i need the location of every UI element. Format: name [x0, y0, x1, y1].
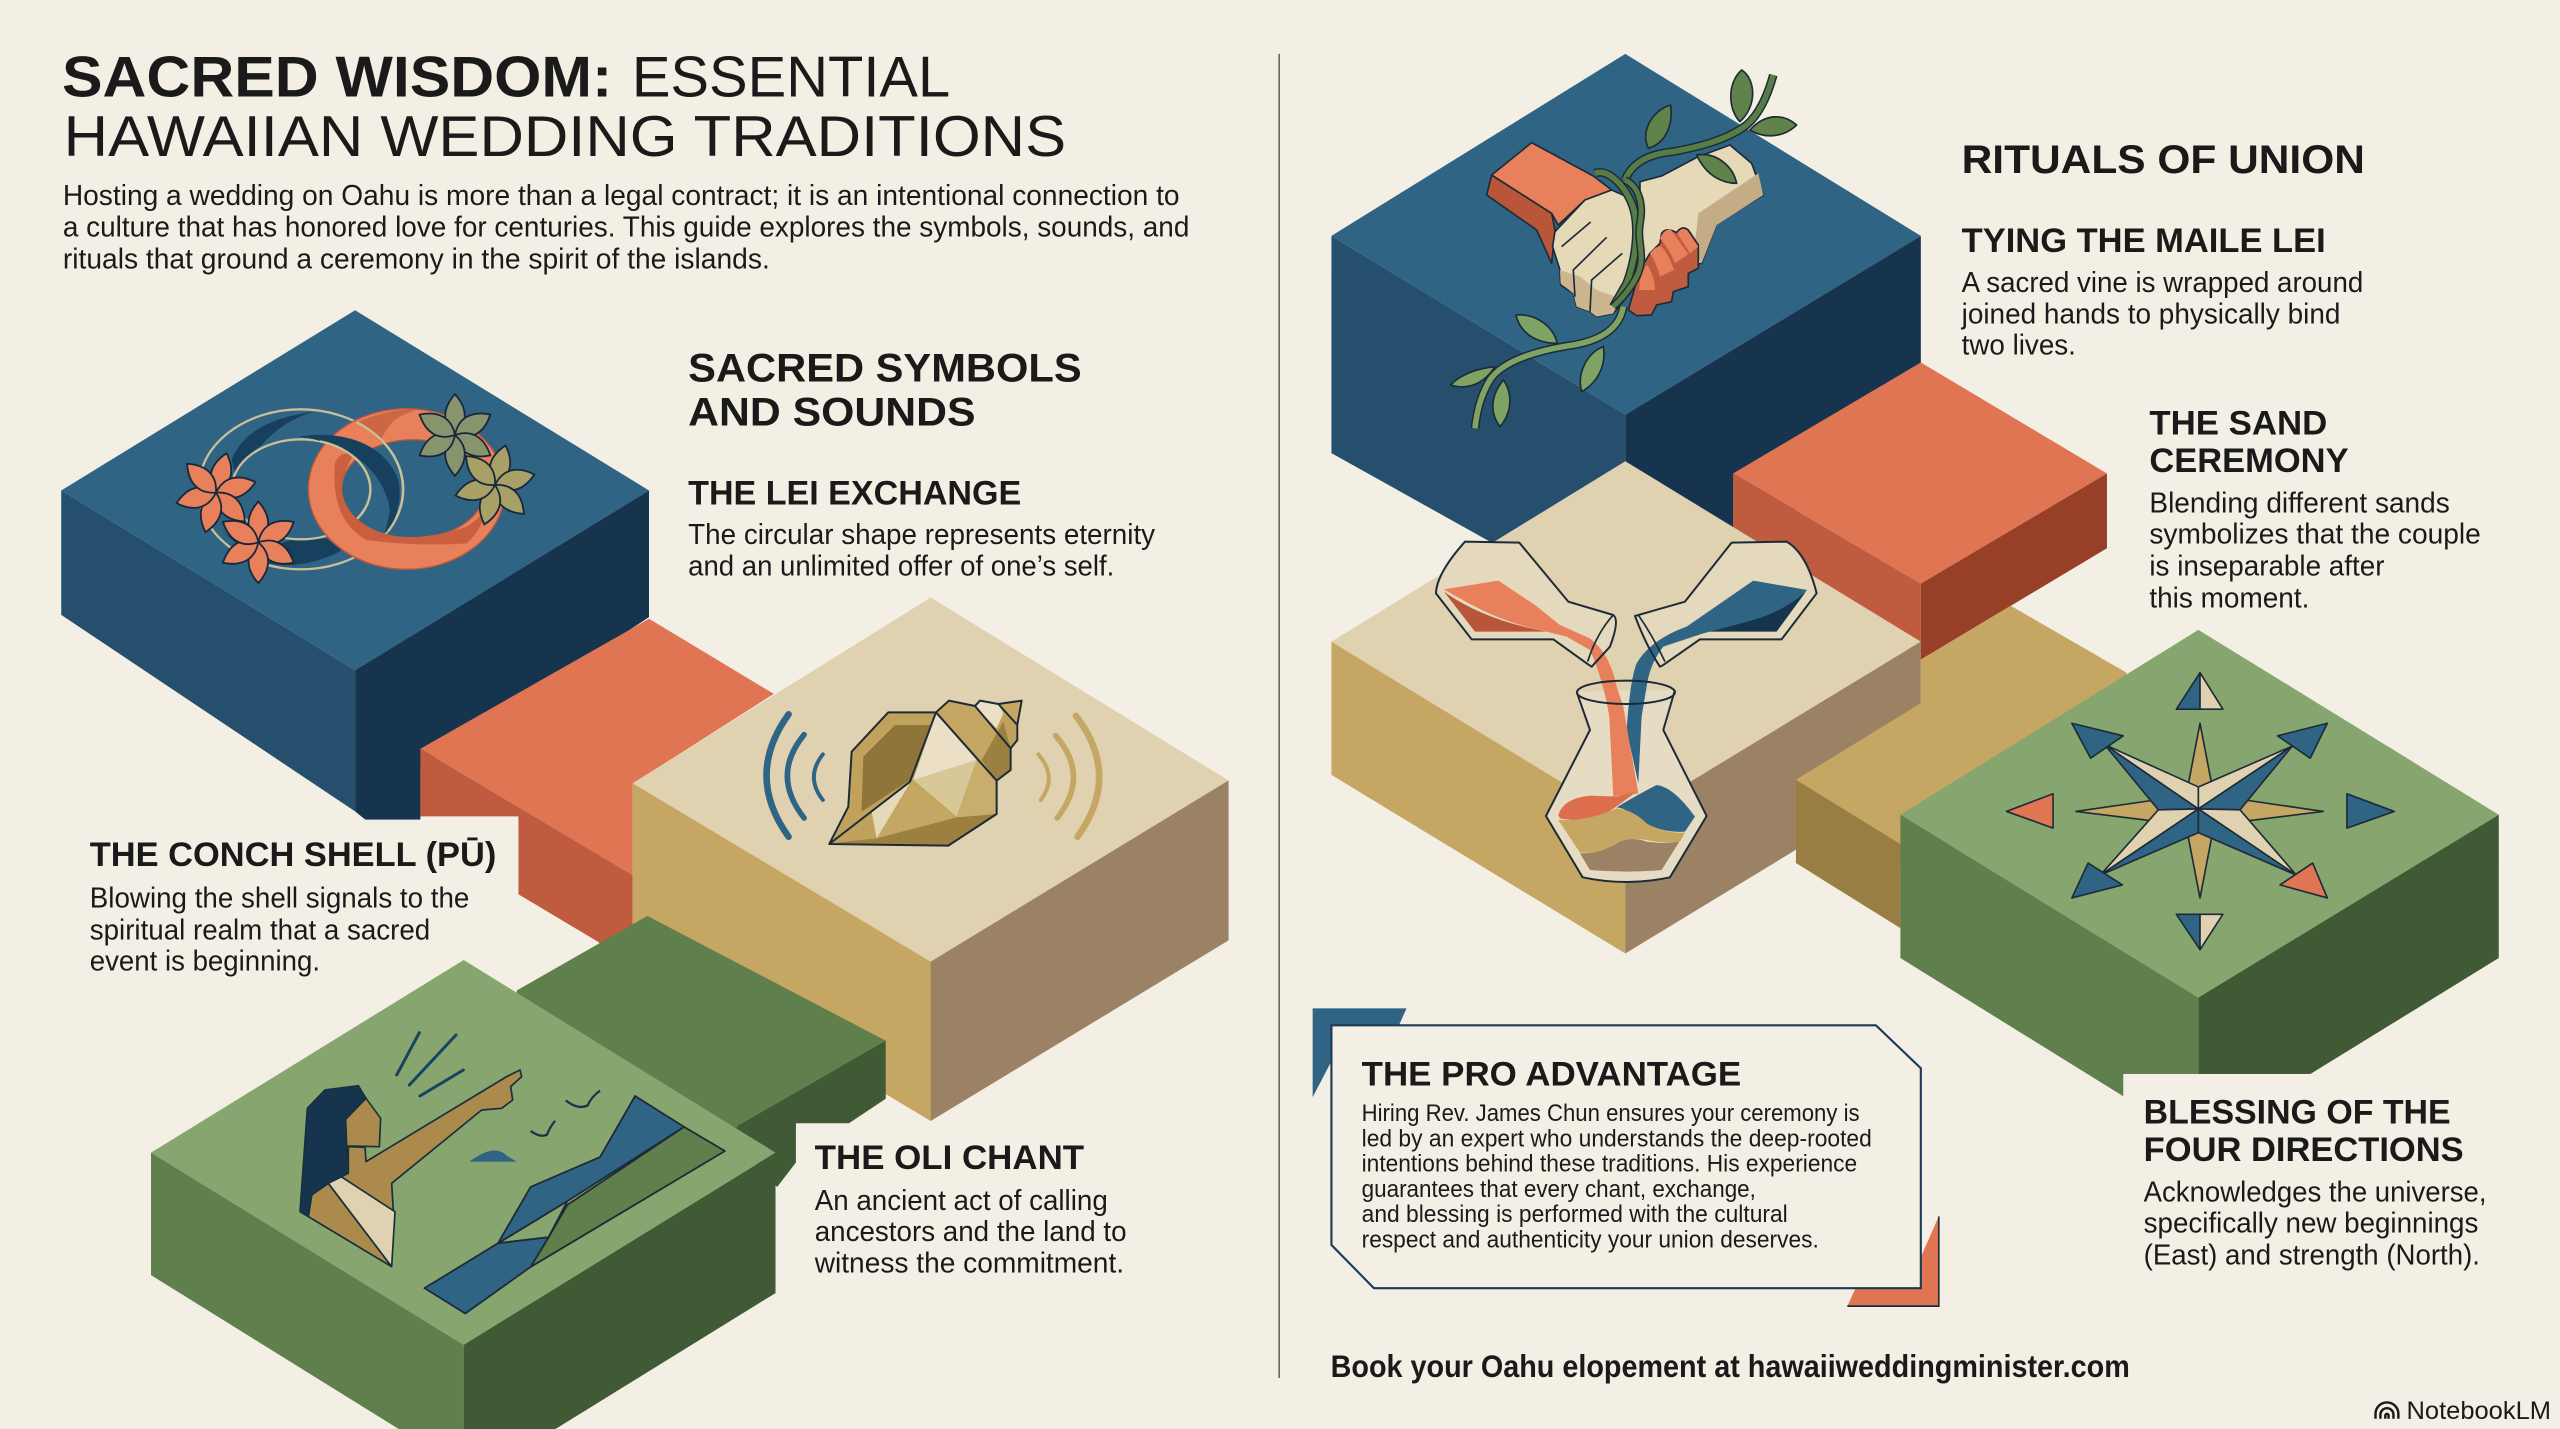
callout: the pro advantage: THE PRO ADVANTAGE — [1362, 1056, 1741, 1094]
panel: conch shell text: event is beginning. — [90, 946, 320, 978]
call to action: Book your Oahu elopement at hawaiiweddingminister.com — [1331, 1348, 2130, 1384]
title: HAWAIIAN WEDDING TRADITIONS — [64, 105, 1066, 169]
panel: front green oli cube — [151, 960, 776, 1429]
callout: the pro advantage: Hiring Rev. James Chun ensures your ceremony is — [1362, 1100, 1860, 1127]
panel: coral sand block — [1733, 362, 2107, 660]
panel: tan conch cube — [633, 598, 1229, 1121]
panel: conch shell text — [90, 836, 496, 978]
panel: maile lei text — [1961, 222, 2363, 361]
panel: maile lei text: TYING THE MAILE LEI — [1962, 222, 2326, 260]
intro paragraph — [63, 180, 1189, 276]
panel: lei exchange text — [688, 474, 1156, 582]
panel: maile lei text: A sacred vine is wrapped around — [1962, 267, 2363, 299]
panel: conch shell text: spiritual realm that a sacred — [90, 914, 430, 946]
title — [62, 45, 1066, 169]
icon: conch shell — [829, 701, 1022, 846]
icon: birds and cloud — [469, 1091, 600, 1162]
panel: sand ceremony text: Blending different sands — [2149, 487, 2450, 519]
icon: pouring vessels and sand vase — [1436, 542, 1817, 882]
panel: oli chant text — [814, 1139, 1127, 1279]
panel: blue lei cube — [61, 310, 649, 821]
panel: sand ceremony text: CEREMONY — [2149, 442, 2349, 480]
panel: sand ceremony text: symbolizes that the couple — [2149, 519, 2481, 551]
panel: maile lei text: two lives. — [1962, 329, 2076, 361]
panel: lei exchange text: THE LEI EXCHANGE — [688, 474, 1021, 512]
brand: NotebookLM: NotebookLM — [2407, 1397, 2551, 1425]
intro paragraph: a culture that has honored love for centuries. This guide explores the symbols, sounds, and — [63, 212, 1189, 244]
panel: oli chant text: witness the commitment. — [814, 1247, 1124, 1279]
panel: oli chant text: THE OLI CHANT — [815, 1139, 1084, 1177]
intro paragraph: rituals that ground a ceremony in the spirit of the islands. — [63, 244, 770, 276]
panel: sand ceremony text — [2149, 404, 2481, 614]
panel: blessing of the four directions text: (East) and strength (North). — [2144, 1239, 2480, 1271]
heading: sacred symbols and sounds: AND SOUNDS — [688, 390, 976, 434]
panel: blue maile cube — [1331, 54, 1921, 563]
panel: blessing of the four directions text: specifically new beginnings — [2144, 1208, 2478, 1240]
intro paragraph: Hosting a wedding on Oahu is more than a legal contract; it is an intentional connection to — [63, 180, 1180, 212]
panel: sand ceremony text: THE SAND — [2149, 404, 2327, 442]
heading: sacred symbols and sounds — [688, 346, 1082, 434]
panel: lei exchange text: and an unlimited offer of one’s self. — [688, 550, 1114, 582]
icon: clasped hands with maile vine — [1451, 70, 1797, 428]
panel: blessing of the four directions text: FOUR DIRECTIONS — [2144, 1131, 2464, 1169]
panel: sand ceremony text: this moment. — [2149, 582, 2309, 614]
callout: the pro advantage: respect and authenticity your union deserves. — [1362, 1226, 1819, 1253]
heading: rituals of union: RITUALS OF UNION — [1962, 138, 2365, 182]
panel: conch shell text: Blowing the shell signals to the — [90, 882, 469, 914]
panel: back gold block — [1796, 606, 2127, 928]
title: ESSENTIAL — [632, 45, 950, 109]
callout: the pro advantage: guarantees that every chant, exchange, — [1362, 1176, 1756, 1203]
panel: sand ceremony text: is inseparable after — [2149, 551, 2385, 583]
callout: the pro advantage — [1313, 1008, 1939, 1306]
callout: the pro advantage: and blessing is performed with the cultural — [1362, 1201, 1788, 1228]
panel: oli chant text: An ancient act of calling — [815, 1185, 1108, 1217]
callout: the pro advantage: intentions behind these traditions. His experience — [1362, 1151, 1857, 1178]
panel: coral connector block — [420, 619, 774, 980]
icon: sound waves — [767, 714, 1099, 837]
callout: the pro advantage: led by an expert who understands the deep-rooted — [1362, 1126, 1872, 1153]
panel: oli chant text: ancestors and the land to — [815, 1216, 1127, 1248]
panel: tan sand cube — [1331, 461, 1921, 953]
panel: lei exchange text: The circular shape represents eternity — [688, 519, 1156, 551]
heading: sacred symbols and sounds: SACRED SYMBOLS — [688, 346, 1082, 390]
icon: landscape — [424, 1096, 725, 1313]
panel: blessing of the four directions text — [2144, 1093, 2487, 1271]
panel: green four directions cube — [1900, 630, 2499, 1143]
panel: back green block — [516, 916, 886, 1187]
panel: maile lei text: joined hands to physically bind — [1961, 298, 2340, 330]
panel: blessing of the four directions text: Acknowledges the universe, — [2144, 1177, 2487, 1209]
title: SACRED WISDOM: — [62, 45, 612, 109]
icon: compass star — [2007, 673, 2394, 950]
icon: interlocked lei rings and flowers — [167, 394, 544, 583]
panel: blessing of the four directions text: BLESSING OF THE — [2144, 1093, 2451, 1131]
icon: chanting figure — [300, 1033, 522, 1267]
panel: conch shell text: THE CONCH SHELL (PŪ) — [90, 836, 496, 874]
